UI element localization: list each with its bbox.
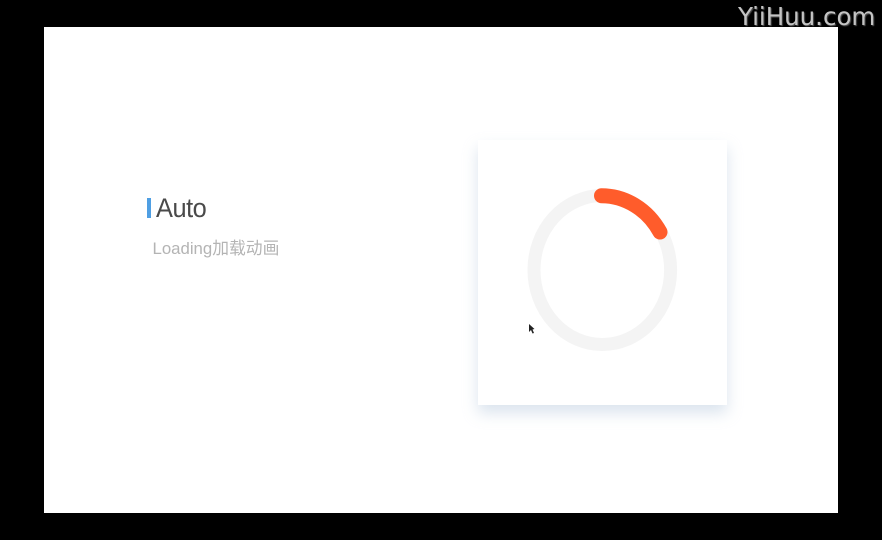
ring track	[534, 196, 671, 344]
heading accent bar	[147, 198, 151, 218]
heading: Auto: Auto	[156, 192, 206, 222]
subheading: Loading加载动画	[152, 239, 279, 258]
ring progress arc	[602, 196, 660, 232]
icon: mouse cursor	[529, 324, 534, 334]
panel: loading card	[478, 140, 727, 405]
watermark: YiiHuu.com	[738, 2, 875, 31]
